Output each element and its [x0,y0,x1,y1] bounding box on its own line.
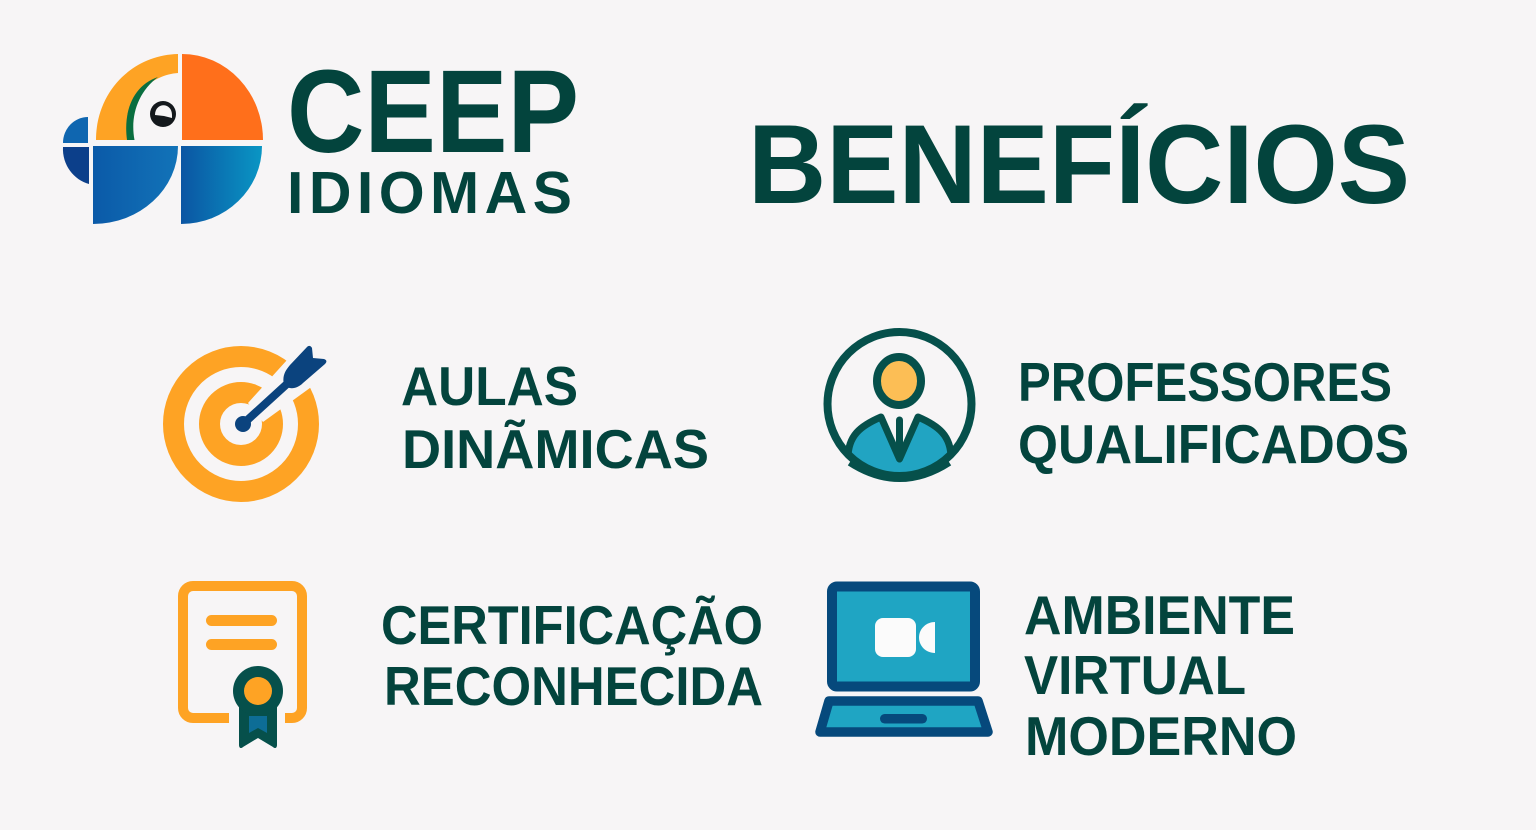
label: professores qualificados: QUALIFICADOS [1018,413,1409,475]
label: certificação reconhecida: RECONHECIDA [384,655,763,717]
benefit: ambiente virtual moderno [820,584,1297,767]
benefit: professores qualificados [828,332,1409,495]
title: BENEFÍCIOS [748,102,1410,227]
label: ambiente virtual moderno: AMBIENTE [1024,584,1295,646]
icon: teacher portrait [828,332,972,495]
brand name: CEEP: CEEP [287,46,579,178]
benefit: certificação reconhecida [183,586,763,748]
icon: certificate with ribbon [183,586,302,748]
label: ambiente virtual moderno: VIRTUAL [1024,644,1246,706]
label: aulas dinâmicas: AULAS [401,355,578,417]
benefit: aulas dinâmicas [174,346,709,492]
label: ambiente virtual moderno: MODERNO [1025,705,1297,767]
label: certificação reconhecida: CERTIFICAÇÃO [381,594,763,656]
label: aulas dinâmicas: DINÃMICAS [402,418,709,480]
icon: laptop with video camera [820,586,988,732]
logo: CEEP Idiomas [63,46,579,226]
logo icon: parrot [63,54,263,224]
label: professores qualificados: PROFESSORES [1018,351,1392,413]
icon: target with arrow [174,346,332,492]
brand subtitle: IDIOMAS: IDIOMAS [287,160,572,226]
